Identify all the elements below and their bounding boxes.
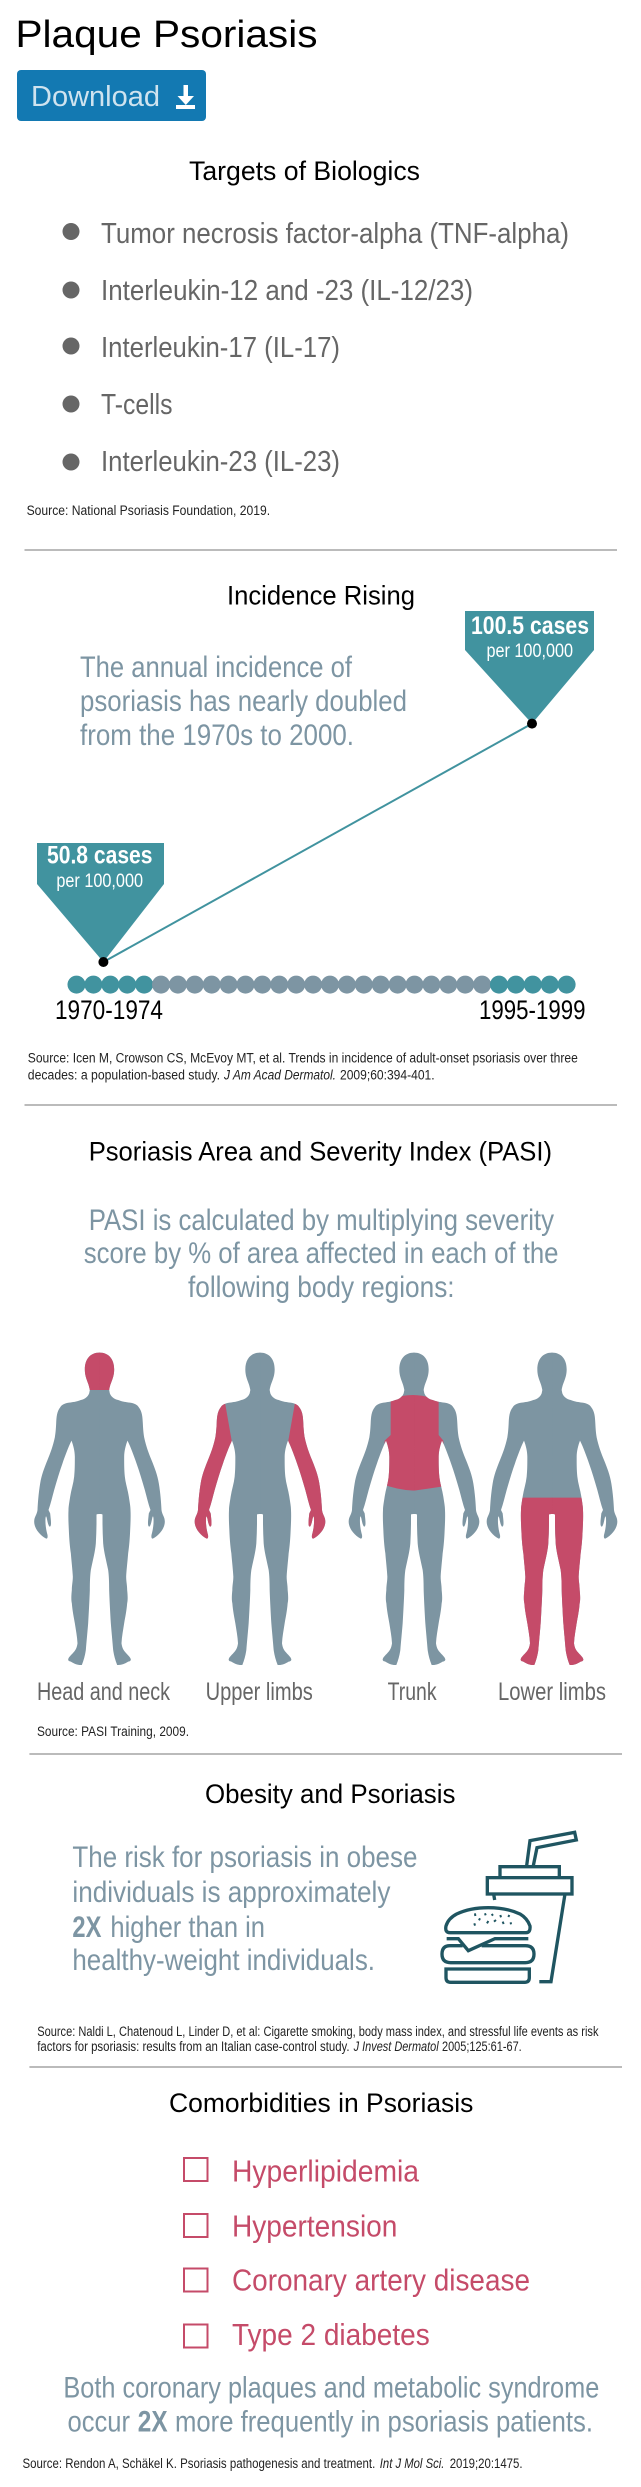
heading: Comorbidities in Psoriasis: [169, 2088, 473, 2118]
list item: IL-17: Interleukin-17 (IL-17): [101, 332, 340, 364]
description: score by % of area affected in each of the: [84, 1237, 559, 1270]
icon: download arrow: [176, 85, 195, 109]
panel: PASI: [34, 1137, 617, 1739]
description: [84, 1204, 559, 1304]
source: decades: a population-based study.: [28, 1068, 220, 1082]
panel: targets of biologics: [27, 156, 569, 518]
panel: incidence rising: [28, 580, 594, 1082]
description: The annual incidence of: [80, 651, 353, 684]
panel: obesity and psoriasis: [37, 1779, 599, 2054]
description: psoriasis has nearly doubled: [80, 685, 407, 718]
source: [28, 1050, 578, 1082]
description: individuals is approximately: [72, 1876, 391, 1909]
description: following body regions:: [188, 1271, 455, 1304]
callout: 50.8 cases: [37, 842, 164, 962]
figure: lower limbs: [487, 1353, 617, 1665]
title: Plaque Psoriasis: [16, 14, 318, 56]
checklist item: hypertension: Hypertension: [232, 2209, 397, 2244]
label: upper limbs: Upper limbs: [206, 1678, 313, 1706]
callout: 100.5 cases: 100.5 cases: [471, 612, 589, 640]
timeline dots: [68, 976, 576, 994]
data point: start: [98, 957, 108, 967]
source: factors for psoriasis: results from an Italian case-control study.: [37, 2039, 350, 2054]
label: 1995-1999: 1995-1999: [479, 995, 586, 1025]
figure: trunk: [349, 1353, 479, 1665]
checklist item: coronary artery disease: Coronary artery disease: [232, 2263, 530, 2298]
list item: T-cells: T-cells: [101, 389, 172, 421]
callout: 100.5 cases: [465, 611, 594, 724]
description: healthy-weight individuals.: [72, 1944, 375, 1977]
download button: [17, 70, 206, 121]
description: higher than in: [110, 1911, 265, 1944]
source: J Am Acad Dermatol.: [223, 1068, 336, 1082]
trend line: [103, 724, 532, 962]
list item: TNF-alpha: Tumor necrosis factor-alpha (TNF-alpha): [101, 218, 569, 250]
panel: comorbidities: [22, 2088, 599, 2471]
source: 2009;60:394-401.: [340, 1068, 435, 1082]
callout: 50.8 cases: 50.8 cases: [47, 842, 152, 870]
figure: head and neck: [34, 1353, 165, 1665]
source: Source: Rendon A, Schäkel K. Psoriasis pathogenesis and treatment.: [22, 2456, 375, 2471]
checklist item: hyperlipidemia: Hyperlipidemia: [232, 2154, 420, 2189]
source: 2005;125:61-67.: [442, 2039, 522, 2054]
description: The risk for psoriasis in obese: [72, 1841, 417, 1874]
heading: Obesity and Psoriasis: [205, 1779, 455, 1809]
description: 2X: [138, 2406, 168, 2439]
data point: end: [527, 719, 537, 729]
source: Int J Mol Sci.: [380, 2456, 444, 2471]
heading: Psoriasis Area and Severity Index (PASI): [89, 1137, 552, 1167]
description: [72, 1841, 417, 1977]
list item: IL-12/23: Interleukin-12 and -23 (IL-12/23): [101, 275, 473, 307]
description: from the 1970s to 2000.: [80, 719, 354, 752]
list item: T-cells: [62, 389, 172, 421]
label: trunk: Trunk: [388, 1678, 437, 1706]
source: Source: PASI Training, 2009.: [37, 1724, 189, 1739]
heading: Targets of Biologics: [189, 156, 420, 186]
label: head and neck: Head and neck: [37, 1678, 170, 1706]
download button: Download: [31, 81, 160, 113]
checklist item: type 2 diabetes: Type 2 diabetes: [232, 2317, 430, 2352]
description: [80, 651, 407, 752]
label: 1970-1974: 1970-1974: [55, 995, 163, 1025]
description: occur: [68, 2406, 130, 2439]
source: Source: National Psoriasis Foundation, 2019.: [27, 503, 270, 518]
icon: burger and drink: [442, 1832, 576, 1982]
source: J Invest Dermatol: [353, 2039, 440, 2054]
list item: IL-23: Interleukin-23 (IL-23): [101, 446, 340, 478]
description: [63, 2372, 599, 2439]
figure: upper limbs: [195, 1353, 325, 1665]
source: Source: Icen M, Crowson CS, McEvoy MT, et al. Trends in incidence of adult-onset psoriasis over three: [28, 1050, 578, 1066]
source: 2019;20:1475.: [450, 2456, 522, 2471]
description: 2X: [72, 1911, 102, 1944]
callout: 100.5 cases: per 100,000: [486, 641, 573, 662]
source: [37, 2024, 599, 2054]
callout: 50.8 cases: per 100,000: [56, 871, 143, 892]
description: PASI is calculated by multiplying severity: [89, 1204, 554, 1237]
heading: Incidence Rising: [227, 580, 415, 610]
label: lower limbs: Lower limbs: [498, 1678, 606, 1706]
